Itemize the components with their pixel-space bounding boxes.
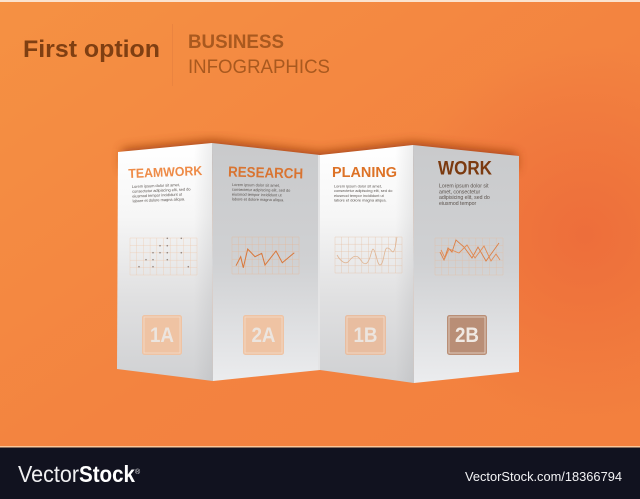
body text: teamwork: labore et dolore magna aliqua. [132, 196, 185, 203]
body text: planing [334, 184, 392, 203]
folded brochure [117, 140, 519, 383]
badge: 1B [345, 315, 386, 355]
chart: curve chart [335, 237, 402, 273]
badge: 1B: 1B [354, 324, 378, 347]
body text: teamwork: Lorem ipsum dolor sit amet, [132, 182, 180, 189]
heading: research: RESEARCH [228, 165, 303, 182]
body text: research [232, 182, 290, 202]
heading: Business Infographics [188, 32, 330, 78]
body text: research: eiusmod tempor incididunt ut [232, 192, 283, 197]
badge: 2B [447, 315, 487, 355]
body text: planing: Lorem ipsum dolor sit amet, [334, 184, 382, 188]
badge: 2A [243, 315, 284, 355]
body text: planing: consectetur adipiscing elit, sed do [334, 188, 392, 193]
logo: VectorStock: Vector [18, 461, 79, 487]
badge: 2B: 2B [455, 324, 479, 347]
panel: planing [318, 145, 414, 383]
body text: teamwork [132, 182, 191, 203]
badge: 1A: 1A [150, 324, 174, 347]
logo: VectorStock: Stock [79, 461, 135, 487]
heading: Business Infographics: INFOGRAPHICS [188, 56, 330, 78]
badge: 2A: 2A [252, 324, 276, 347]
logo: VectorStock: ® [135, 468, 141, 476]
title: First option: First option [23, 36, 160, 63]
chart: scatter plot [130, 238, 197, 275]
chart: multi-line chart [435, 238, 503, 275]
image id url: VectorStock.com/18366794 [465, 469, 622, 484]
panel: work [413, 145, 519, 383]
body text: work: amet, consectetur [439, 189, 481, 195]
body text: planing: eiusmod tempor incididunt ut [334, 193, 385, 198]
body text: research: labore et dolore magna aliqua. [232, 196, 284, 202]
body text: work: adipisicing elit, sed do [439, 195, 490, 201]
body text: planing: labore et dolore magna aliqua. [334, 198, 387, 203]
logo: VectorStock [18, 461, 141, 487]
body text: research: Lorem ipsum dolor sit amet, [232, 182, 280, 188]
footer band [0, 446, 640, 499]
body text: research: consectetur adipiscing elit, sed do [232, 187, 290, 193]
chart: line chart [232, 237, 299, 274]
body text: teamwork: eiusmod tempor incididunt ut [132, 192, 183, 199]
heading: Business Infographics: BUSINESS [188, 32, 284, 53]
body text: work: Lorem ipsum dolor sit [439, 184, 489, 190]
body text: teamwork: consectetur adipiscing elit, sed do [132, 186, 191, 194]
heading: planing: PLANING [332, 165, 397, 181]
heading: teamwork: TEAMWORK [128, 163, 203, 181]
body text: work [439, 184, 490, 207]
heading: work: WORK [438, 158, 492, 180]
badge: 1A [142, 315, 182, 355]
panel: research [212, 143, 320, 381]
panel: teamwork [117, 143, 213, 381]
body text: work: eiusmod tempor [439, 201, 476, 207]
